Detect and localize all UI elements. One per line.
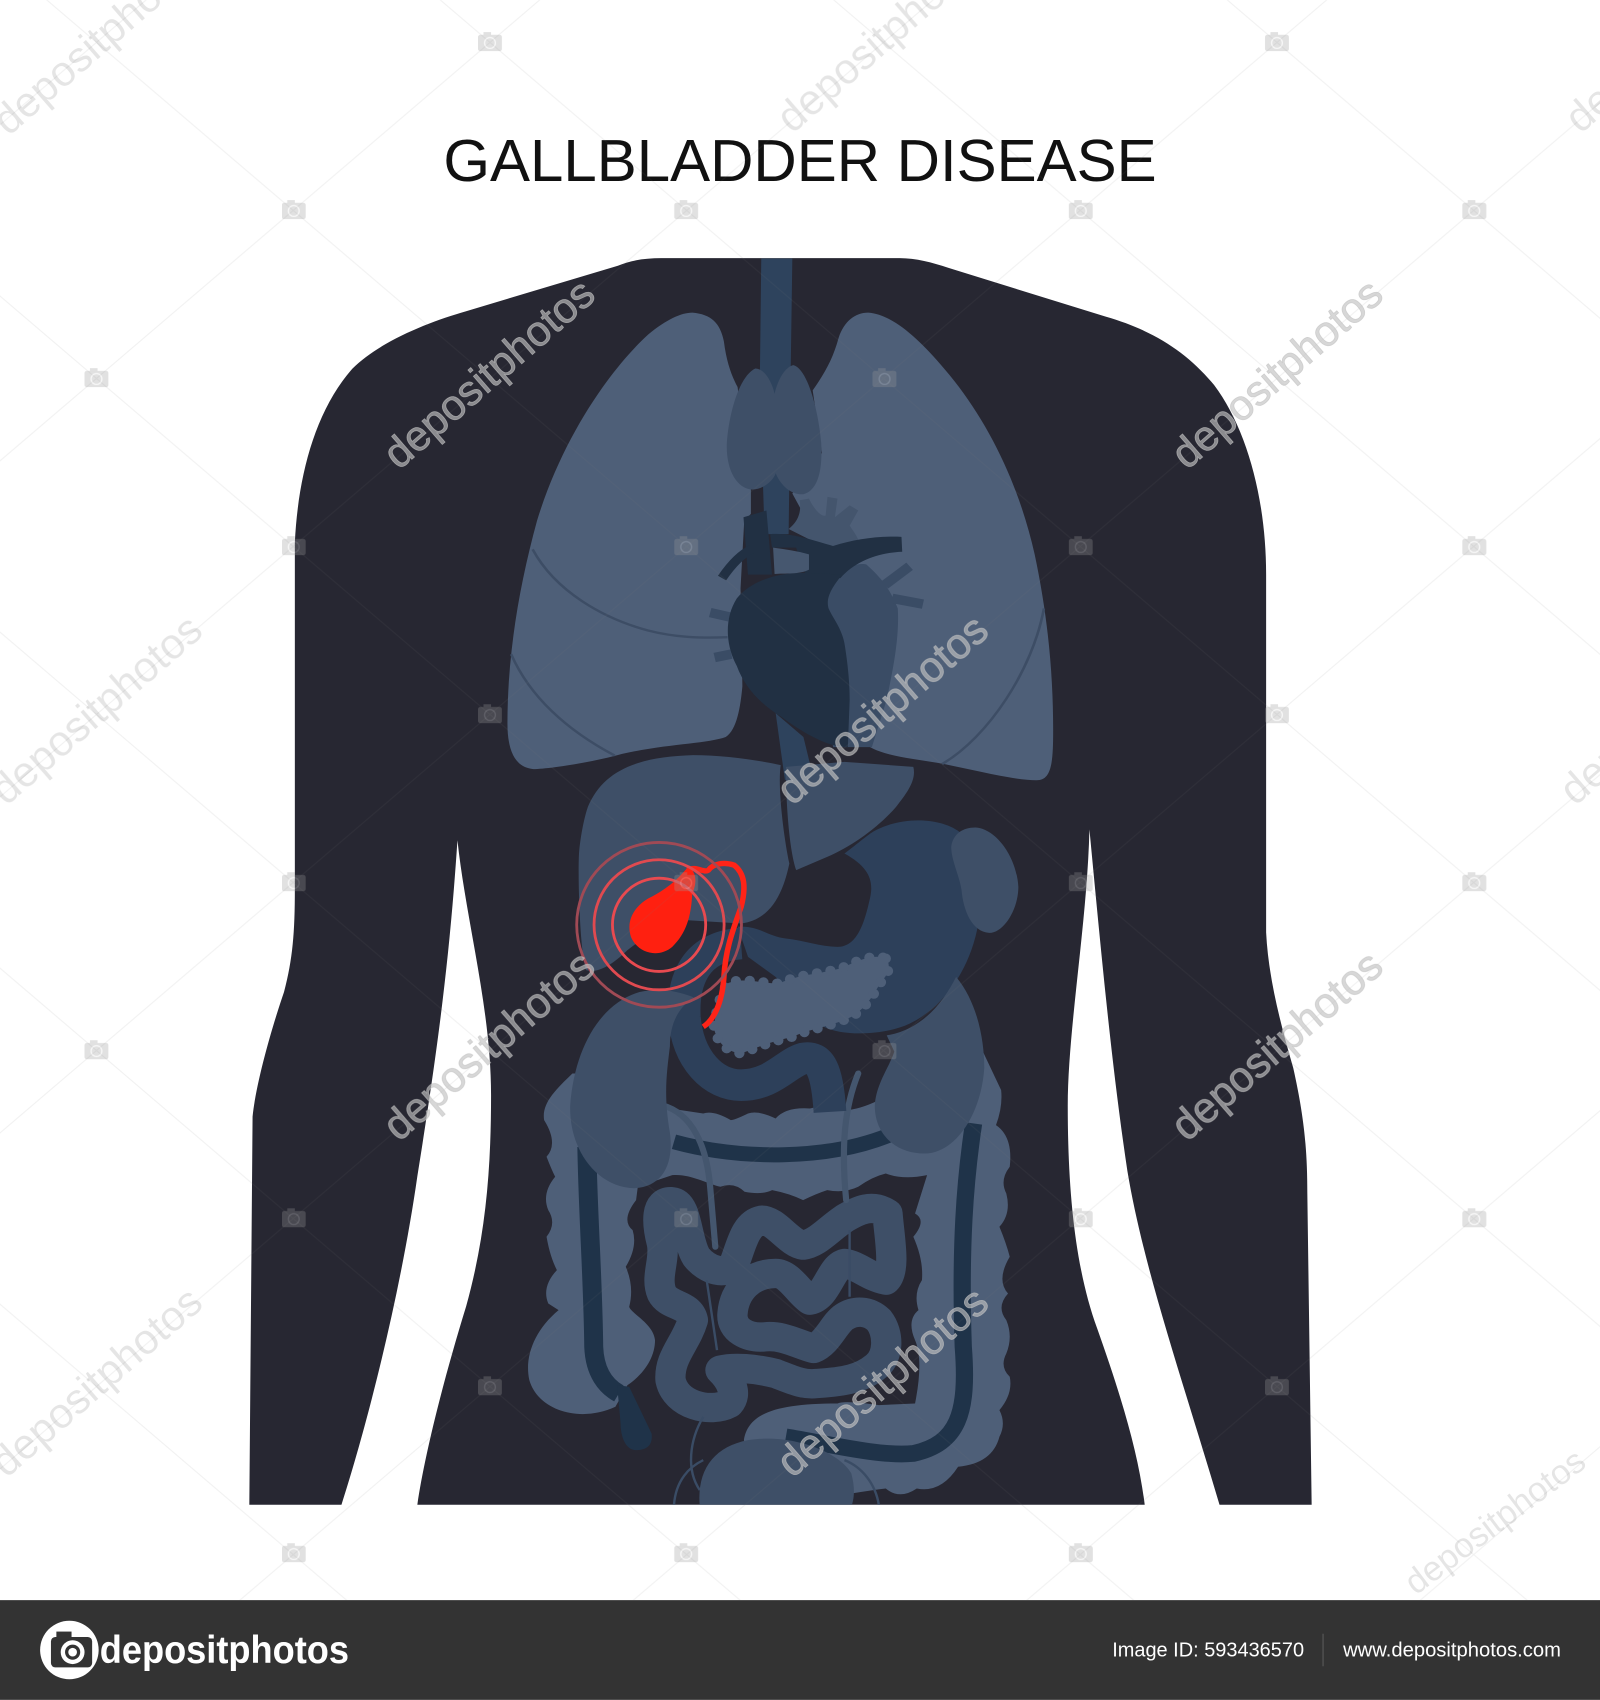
left kidney (570, 990, 694, 1188)
pancreas (714, 957, 889, 1053)
thin vessels (674, 1230, 879, 1505)
watermarks over figure: depositphotos (374, 269, 603, 477)
heart branches (710, 566, 923, 658)
bile duct (688, 863, 744, 1027)
watermarks over figure: depositphotos (374, 941, 603, 1149)
rectum end (617, 1385, 652, 1450)
heart vessels fan (789, 497, 859, 548)
descending aorta (776, 713, 811, 780)
thyroid (727, 365, 821, 494)
pain rings (577, 842, 741, 1007)
footer logo text: depositphotos (100, 1629, 349, 1672)
stomach (738, 820, 980, 1033)
watermarks over figure: depositphotos (767, 605, 997, 813)
large intestine and lower organs (528, 1050, 1010, 1507)
watermarks over figure: depositphotos (1162, 941, 1392, 1149)
gallbladder group (629, 863, 889, 1053)
left lung (507, 313, 751, 769)
lung fissure lines (511, 549, 1044, 764)
watermarks over figure: depositphotos (767, 1277, 997, 1486)
title: GALLBLADDER DISEASE (443, 127, 1157, 194)
footer bar (0, 1600, 1600, 1700)
anatomy organs (507, 259, 1053, 1507)
small intestine (658, 1202, 891, 1408)
watermarks over figure (374, 269, 1392, 1486)
bladder (699, 1439, 854, 1507)
gallbladder (629, 867, 695, 953)
large intestine (528, 1050, 1010, 1494)
liver left lobe (579, 755, 789, 971)
spleen (951, 827, 1018, 933)
duodenum (684, 943, 830, 1112)
footer logo icon (40, 1621, 99, 1679)
upper abdominal organs (579, 755, 1018, 1112)
camera watermark icons (85, 32, 1486, 1562)
right lung (792, 313, 1053, 780)
trachea (760, 259, 792, 534)
ureters (662, 1073, 858, 1247)
thoracic organs (507, 259, 1053, 780)
body silhouette (249, 258, 1312, 1505)
website url: www.depositphotos.com (1342, 1640, 1561, 1662)
heart right side (828, 564, 898, 748)
image id: Image ID: 593436570 (1112, 1640, 1304, 1662)
heart main (722, 510, 902, 747)
watermarks over figure: depositphotos (1162, 269, 1392, 477)
watermarks on background: depositphotos (1398, 1442, 1593, 1602)
colon inner tubes (587, 1123, 974, 1454)
aortic window (773, 548, 809, 574)
right kidney (875, 977, 984, 1154)
liver right lobe (786, 762, 914, 870)
